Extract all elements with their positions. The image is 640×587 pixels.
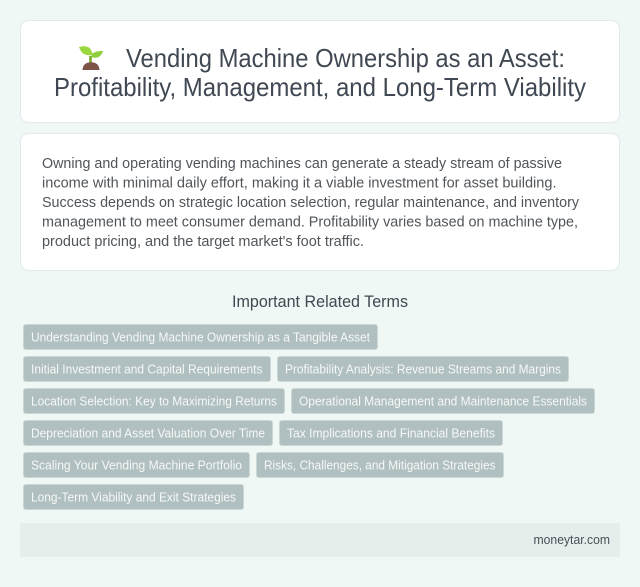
footer	[20, 523, 620, 557]
heading: Profitability, Management, and Long-Term Viability	[54, 74, 586, 102]
tag: scaling portfolio: Scaling Your Vending Machine Portfolio	[31, 458, 242, 472]
tag: operational management: Operational Management and Maintenance Essentials	[299, 394, 587, 408]
tag: profitability analysis: Profitability Analysis: Revenue Streams and Margins	[285, 362, 561, 376]
tag: long-term viability	[24, 484, 244, 510]
tag: profitability analysis	[278, 356, 568, 382]
tag: scaling portfolio	[24, 452, 250, 478]
tag: location selection	[24, 388, 284, 414]
panel: title	[20, 20, 620, 122]
text block: summary paragraph: management to meet consumer demand. Profitability varies based on machine type,	[42, 214, 578, 230]
text block: summary paragraph: Owning and operating vending machines can generate a steady stream of passive	[42, 155, 562, 172]
tag: location selection: Location Selection: Key to Maximizing Returns	[31, 394, 277, 408]
footer text: moneytar.com	[534, 533, 610, 547]
tag list	[24, 324, 594, 510]
tag: initial investment	[24, 356, 270, 382]
icon: sprout	[79, 46, 103, 70]
tag: depreciation	[24, 420, 272, 446]
tag: tax implications: Tax Implications and Financial Benefits	[287, 426, 495, 440]
tag: tax implications	[280, 420, 502, 446]
tag: long-term viability: Long-Term Viability and Exit Strategies	[31, 490, 236, 504]
heading: important related terms: Important Related Terms	[232, 293, 408, 311]
tag: tangible asset	[24, 324, 378, 350]
tag: operational management	[292, 388, 594, 414]
heading	[54, 45, 586, 102]
tag: risks	[256, 452, 504, 478]
tag: initial investment: Initial Investment and Capital Requirements	[31, 362, 262, 376]
text block: summary paragraph: product pricing, and the target market's foot traffic.	[42, 233, 364, 250]
text block: summary paragraph: Success depends on strategic location selection, regular maintenance, and inventory	[42, 194, 579, 211]
tag: risks: Risks, Challenges, and Mitigation Strategies	[264, 458, 496, 472]
tag: depreciation: Depreciation and Asset Valuation Over Time	[31, 426, 265, 440]
text block: summary paragraph: income with minimal daily effort, making it a viable investment for asset building.	[42, 174, 556, 192]
text block: summary paragraph	[42, 155, 579, 250]
heading: Vending Machine Ownership as an Asset:	[126, 45, 565, 73]
tag: tangible asset: Understanding Vending Machine Ownership as a Tangible Asset	[31, 330, 370, 344]
panel: summary	[20, 134, 620, 270]
